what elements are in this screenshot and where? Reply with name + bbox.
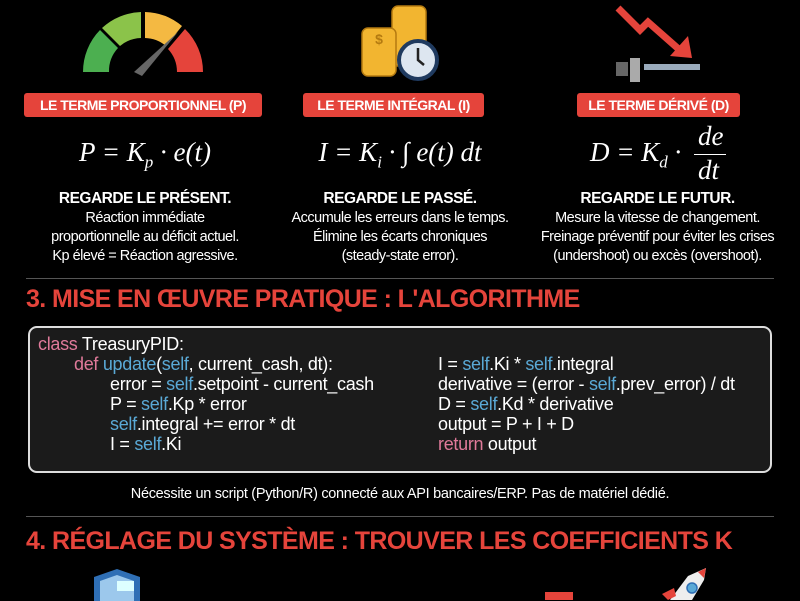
formula D: dt bbox=[698, 155, 719, 185]
text: P: proportionnelle au déficit actuel. bbox=[51, 229, 239, 245]
code block: D = self.Kd * derivative bbox=[438, 394, 613, 414]
icon: red block bbox=[545, 592, 573, 600]
code block: class TreasuryPID: bbox=[38, 334, 184, 354]
icon: coins and clock bbox=[361, 5, 439, 81]
icon: coins and clock: $ bbox=[375, 31, 383, 47]
formula D: D = Kd · bbox=[590, 137, 681, 171]
text: D: Mesure la vitesse de changement. bbox=[555, 210, 760, 226]
label: I bbox=[303, 93, 484, 117]
formula D bbox=[590, 121, 726, 185]
text: I: REGARDE LE PASSÉ. bbox=[323, 190, 477, 207]
code block: P = self.Kp * error bbox=[110, 394, 247, 414]
label: D bbox=[577, 93, 740, 117]
code block: self.integral += error * dt bbox=[110, 414, 295, 434]
icon: rocket bbox=[662, 568, 706, 600]
icon: gauge bbox=[83, 12, 203, 76]
label: P bbox=[24, 93, 262, 117]
text: P: Réaction immédiate bbox=[85, 210, 205, 226]
heading section 3: 3. MISE EN ŒUVRE PRATIQUE : L'ALGORITHME bbox=[26, 285, 580, 313]
text: I bbox=[291, 189, 508, 264]
icon: falling arrow and brake bbox=[616, 6, 700, 82]
code block: error = self.setpoint - current_cash bbox=[110, 374, 374, 394]
text: D: REGARDE LE FUTUR. bbox=[580, 190, 735, 207]
text: I: Élimine les écarts chroniques bbox=[313, 229, 487, 245]
text: P: REGARDE LE PRÉSENT. bbox=[59, 190, 231, 207]
text: D bbox=[541, 190, 774, 264]
code block: output = P + I + D bbox=[438, 414, 574, 434]
code block: return output bbox=[438, 434, 536, 454]
formula P: P = Kp · e(t) bbox=[79, 137, 211, 171]
label: P: LE TERME PROPORTIONNEL (P) bbox=[40, 97, 246, 113]
text: D: (undershoot) ou excès (overshoot). bbox=[553, 248, 762, 264]
text: P: Kp élevé = Réaction agressive. bbox=[52, 248, 238, 264]
formula I: I = Ki · ∫ e(t) dt bbox=[318, 137, 482, 171]
code block: I = self.Ki bbox=[110, 434, 181, 454]
code block: I = self.Ki * self.integral bbox=[438, 354, 614, 374]
code block: derivative = (error - self.prev_error) / dt bbox=[438, 374, 735, 394]
text: P bbox=[51, 189, 239, 264]
code block bbox=[28, 326, 772, 473]
label: D: LE TERME DÉRIVÉ (D) bbox=[588, 97, 729, 113]
footnote: Nécessite un script (Python/R) connecté aux API bancaires/ERP. Pas de matériel dédié. bbox=[131, 486, 669, 502]
heading section 4: 4. RÉGLAGE DU SYSTÈME : TROUVER LES COEFFICIENTS K bbox=[26, 527, 732, 555]
text: I: Accumule les erreurs dans le temps. bbox=[291, 210, 508, 226]
icon: shield bbox=[94, 569, 140, 601]
text: I: (steady-state error). bbox=[342, 248, 458, 264]
label: I: LE TERME INTÉGRAL (I) bbox=[317, 97, 470, 113]
formula D: de bbox=[698, 121, 723, 151]
code block: def update(self, current_cash, dt): bbox=[74, 354, 333, 374]
text: D: Freinage préventif pour éviter les crises bbox=[541, 229, 774, 245]
